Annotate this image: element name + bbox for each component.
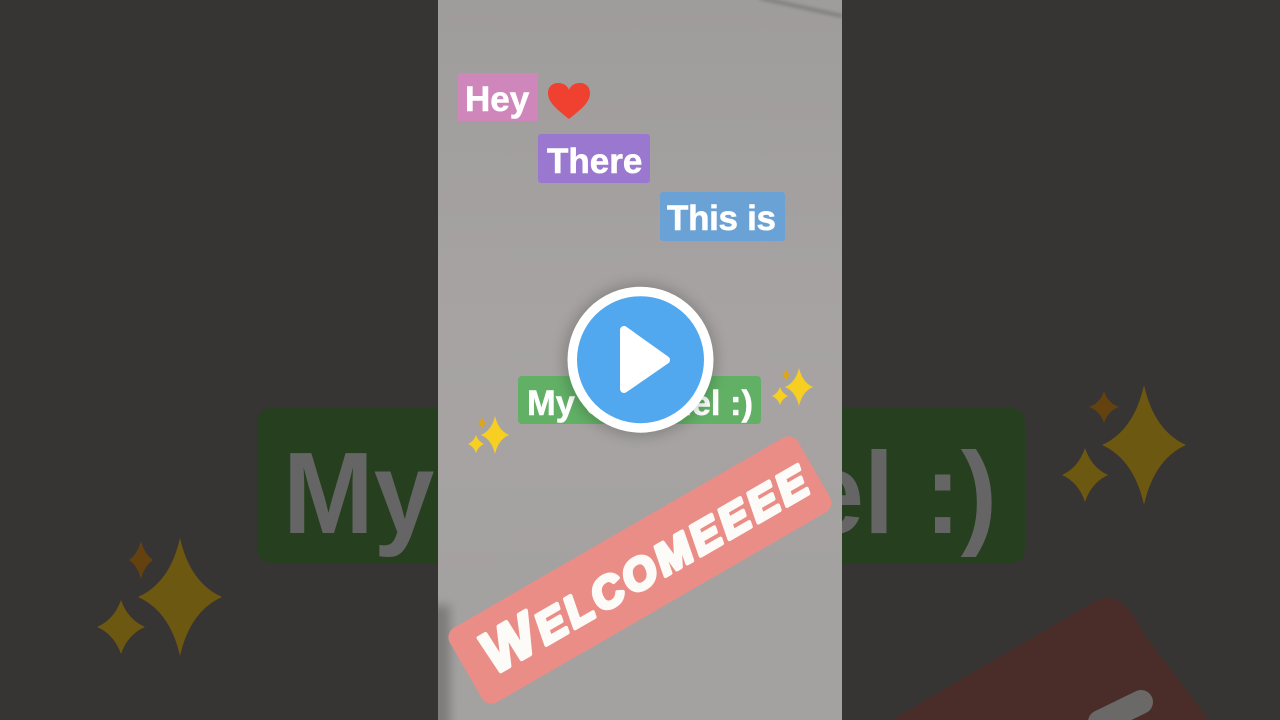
label: This is: [660, 192, 785, 241]
label: This is: This is: [667, 199, 776, 238]
label: There: [538, 134, 650, 183]
backdrop: enlarged green label: My Channel :): [283, 428, 997, 558]
panel: central video frame: [430, 0, 842, 720]
backdrop: enlarged left sparkles: [97, 538, 222, 656]
label: There: There: [547, 142, 642, 181]
panel: blurred left and right backdrop: [97, 386, 1209, 720]
backdrop: enlarged welcome banner: [892, 598, 1209, 720]
banner: welcome: WELCOMEEEE: [469, 446, 820, 686]
label: Hey: Hey: [465, 80, 530, 119]
backdrop: enlarged right sparkles: [1062, 385, 1186, 505]
icon: red heart: [548, 83, 590, 119]
icon: left sparkles: [468, 416, 509, 454]
label: Hey: [458, 73, 538, 121]
icon: play button: [564, 284, 716, 436]
icon: right sparkles: [772, 368, 813, 406]
label: My Channel: My Channel :): [527, 384, 753, 423]
